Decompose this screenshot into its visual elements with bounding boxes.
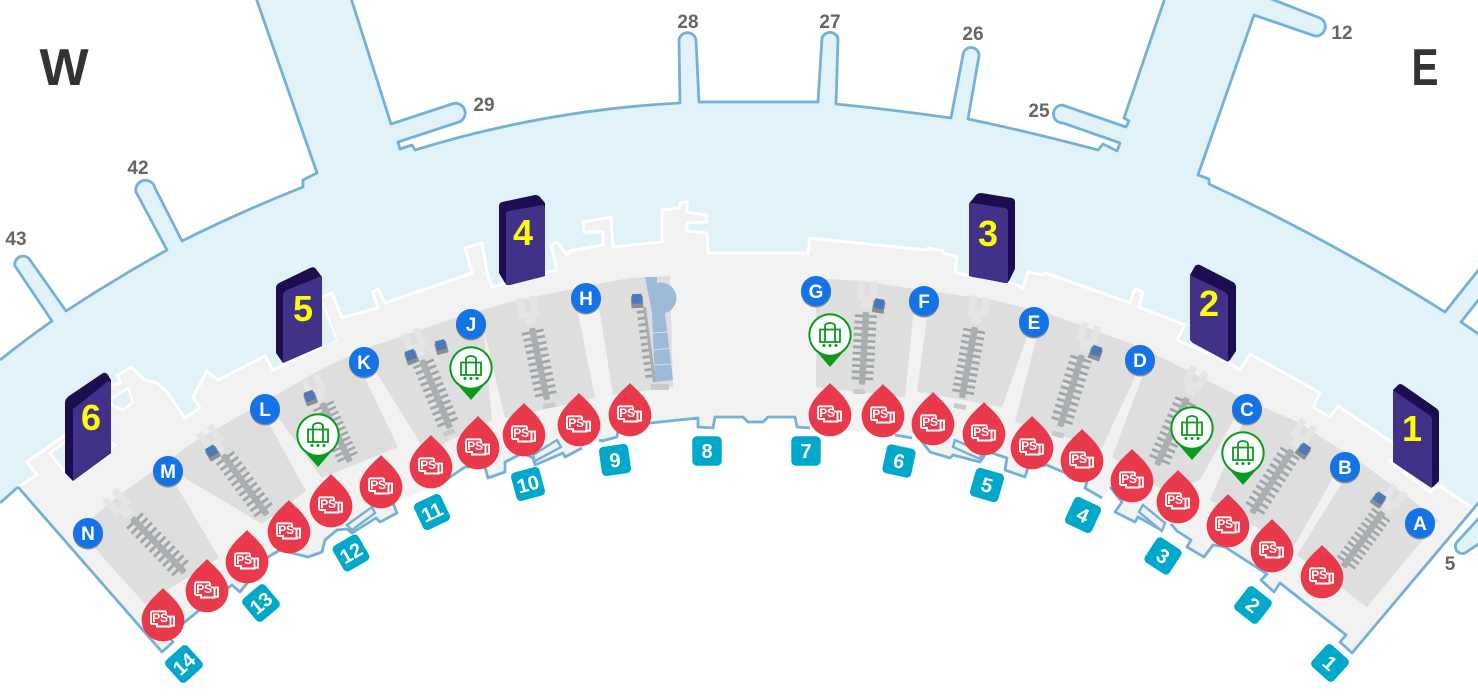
check-in row letter markers: B: [1338, 458, 1352, 479]
check-in row letter markers: F: [918, 292, 930, 313]
teal gate badges: 9: [608, 449, 622, 473]
remote stand numbers: 27: [819, 12, 841, 33]
teal gate badges: 3: [1152, 545, 1173, 569]
red PS drop markers: PS: [196, 582, 212, 596]
remote stand numbers: 28: [677, 12, 699, 33]
sign 5: 5: [293, 288, 313, 329]
sign 3: 3: [978, 213, 998, 254]
elevator boxes: [204, 294, 1387, 509]
apron water area: [0, 0, 1478, 554]
check-in row letter markers: [73, 276, 1435, 550]
sign 6: [65, 373, 111, 481]
red PS drop markers: PS: [278, 523, 294, 537]
red PS drop markers: PS: [236, 553, 252, 567]
check-in row letter markers: D: [1133, 351, 1147, 372]
check-in row letter markers: L: [259, 400, 271, 421]
red PS drop markers: PS: [467, 439, 483, 453]
H concourse glass atrium: [645, 277, 677, 382]
check-in row letter markers: C: [1240, 400, 1254, 421]
red PS drop markers: PS: [1121, 472, 1137, 486]
red PS drop markers: PS: [1217, 517, 1233, 531]
red PS drop markers: PS: [872, 407, 888, 421]
remote stand numbers: 43: [5, 229, 27, 250]
red PS drop markers: PS: [1311, 568, 1327, 582]
teal gate badges: 12: [336, 539, 367, 569]
check-in row letter markers: M: [160, 462, 176, 483]
red PS drop markers: PS: [1071, 452, 1087, 466]
teal gate badges: [163, 436, 1351, 685]
remote stand numbers: 26: [962, 24, 984, 45]
red PS drop markers: PS: [1021, 439, 1037, 453]
sign 1: [1393, 384, 1439, 488]
red PS drop markers: PS: [513, 426, 529, 440]
red PS drop markers: PS: [568, 416, 584, 430]
remote stand numbers: [5, 12, 1456, 575]
red PS drop markers: PS: [320, 497, 336, 511]
sign 1: 1: [1402, 408, 1422, 449]
gate piers: [102, 280, 1409, 580]
remote stand numbers: 12: [1331, 23, 1353, 44]
red PS drop markers: PS: [1261, 542, 1277, 556]
check-in row letter markers: E: [1028, 313, 1040, 334]
check-in row letter markers: A: [1413, 514, 1427, 535]
check-in row letter markers: K: [357, 353, 371, 374]
green baggage pins: [296, 313, 1265, 485]
red PS drop markers: [142, 383, 1343, 641]
teal gate badges: 14: [169, 649, 201, 680]
teal gate badges: 4: [1073, 504, 1093, 529]
red PS drop markers: PS: [420, 458, 436, 472]
sign 4: [499, 195, 545, 285]
check-in row letter markers: N: [81, 524, 95, 545]
red PS drop markers: PS: [619, 406, 635, 420]
sign 2: [1190, 265, 1236, 362]
teal gate badges: 5: [978, 474, 995, 498]
remote stand numbers: 42: [127, 158, 149, 179]
teal gate badges: 7: [800, 441, 812, 463]
direction label W: W: [39, 39, 89, 97]
check-in row letter markers: G: [809, 282, 823, 303]
red PS drop markers: PS: [973, 425, 989, 439]
teal gate badges: 2: [1241, 594, 1264, 618]
teal gate badges: 13: [246, 588, 277, 619]
red PS drop markers: PS: [152, 611, 168, 625]
sign 3: [969, 193, 1015, 283]
remote stand numbers: 25: [1028, 101, 1050, 122]
gate hall blocks: [92, 276, 1439, 607]
remote stand numbers: 29: [473, 95, 495, 116]
check-in row letter markers: H: [579, 289, 593, 310]
sign 5: [276, 267, 322, 363]
teal gate badges: 1: [1318, 652, 1341, 676]
teal gate badges: 6: [891, 450, 907, 474]
red PS drop markers: PS: [819, 406, 835, 420]
check-in row letter markers: J: [466, 315, 476, 336]
sign 4: 4: [513, 212, 533, 253]
teal gate badges: 8: [701, 441, 713, 463]
teal gate badges: 10: [515, 471, 542, 498]
direction label E: E: [1412, 39, 1438, 97]
terminal building: [18, 202, 1478, 653]
remote stand numbers: 5: [1445, 554, 1456, 575]
sign 2: 2: [1199, 283, 1219, 324]
sign 6: 6: [81, 397, 101, 438]
red PS drop markers: PS: [1167, 493, 1183, 507]
teal gate badges: 11: [418, 498, 447, 527]
red PS drop markers: PS: [370, 478, 386, 492]
red PS drop markers: PS: [922, 415, 938, 429]
